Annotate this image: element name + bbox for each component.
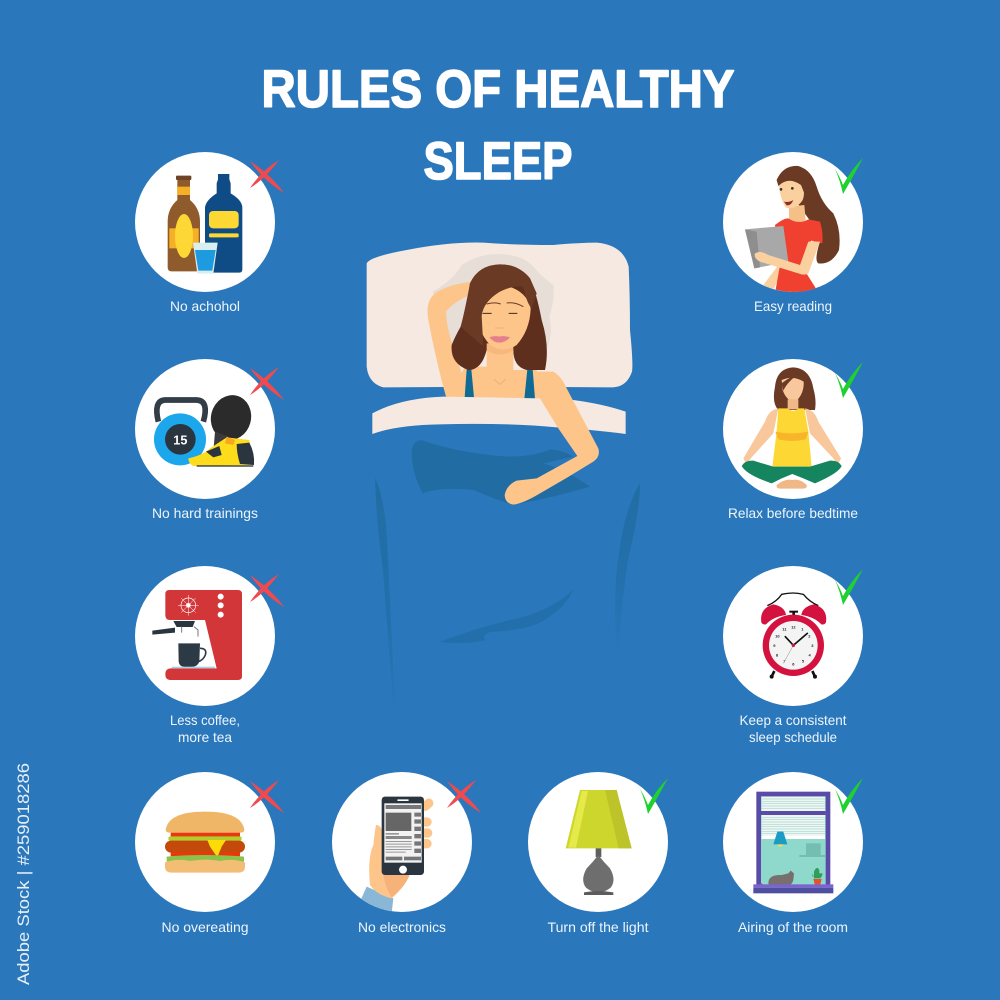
icon: kettlebell, racket and shoe (154, 391, 256, 467)
panel: no hard trainings (135, 359, 284, 521)
icon: alarm clock: 4 (809, 652, 812, 657)
lower hair (452, 264, 547, 370)
neck (487, 343, 513, 354)
panel: less coffee: more tea (178, 729, 232, 745)
label: No overeating (162, 919, 248, 935)
lying arm (505, 372, 599, 505)
circle (528, 772, 668, 912)
icon: window with cat (753, 792, 833, 893)
icon: woman meditating (742, 367, 842, 489)
icon: burger (165, 812, 245, 873)
icon: alarm clock: 6 (792, 662, 795, 667)
cross mark (447, 780, 481, 813)
mouth (489, 336, 510, 343)
neck line (494, 379, 505, 384)
stock image id caption: Adobe Stock | #259018286 (14, 763, 33, 985)
blanket fold (372, 397, 626, 434)
label: Turn off the light (548, 919, 649, 935)
icon: kettlebell, racket and shoe: 15 (173, 434, 187, 448)
icon: alarm clock: 11 (782, 627, 787, 632)
check mark (640, 778, 668, 814)
cross mark (250, 160, 284, 193)
check mark (835, 158, 863, 194)
cross mark (250, 367, 284, 400)
panel: turn off the light (528, 772, 668, 935)
panel: keep a consistent sleep schedule: sleep schedule (749, 729, 837, 745)
panel: keep a consistent sleep schedule (723, 566, 863, 745)
check mark (835, 569, 863, 605)
pillow head shadow (433, 254, 554, 350)
panel: no electronics (332, 772, 481, 935)
circle (135, 359, 275, 499)
eyebrows (487, 303, 523, 307)
icon: alarm clock: 12 (791, 624, 796, 629)
icon: alarm clock: 2 (808, 634, 811, 639)
icon: coffee machine (152, 590, 242, 680)
face (476, 285, 531, 349)
label: Keep a consistent (740, 712, 847, 728)
nose (495, 326, 504, 329)
panel: less coffee (135, 566, 284, 745)
icon: alarm clock: 8 (776, 652, 779, 657)
panel: easy reading (723, 152, 863, 314)
icon: table lamp (566, 790, 632, 895)
torso (447, 347, 542, 400)
infographic canvas (17, 69, 863, 985)
circle (332, 772, 472, 912)
label: Airing of the room (738, 919, 848, 935)
icon: alarm clock (761, 593, 826, 679)
icon: alarm clock: 10 (775, 634, 780, 639)
circle (723, 359, 863, 499)
label: Less coffee, (170, 712, 240, 728)
label: No hard trainings (152, 505, 258, 521)
pillow (367, 243, 632, 387)
upper hair (461, 264, 537, 347)
illustration: woman sleeping in bed (367, 243, 632, 505)
panel: relax before bedtime (723, 359, 863, 521)
label: No achohol (170, 298, 240, 314)
icon: alarm clock: 1 (801, 627, 804, 632)
blanket body shadow (412, 440, 590, 505)
blanket wrinkle shadows (375, 478, 640, 735)
circle (135, 772, 275, 912)
title (262, 60, 734, 191)
label: Relax before bedtime (728, 505, 858, 521)
panel: no alcohol (135, 152, 284, 314)
raised arm (427, 282, 473, 397)
icon: alarm clock: 5 (802, 659, 805, 664)
circle (135, 566, 275, 706)
label: No electronics (358, 919, 446, 935)
top straps (465, 369, 535, 399)
icon: bottles and glass (168, 174, 242, 274)
check mark (835, 778, 863, 814)
panel: no overeating (135, 772, 284, 935)
panel: airing of the room (723, 772, 863, 935)
icon: alarm clock: 3 (811, 643, 814, 648)
icon: alarm clock: 7 (783, 659, 786, 664)
closed eyes (483, 312, 517, 315)
label: Easy reading (754, 298, 832, 314)
cross mark (250, 574, 284, 607)
icon: woman reading a book (745, 166, 840, 293)
title: SLEEP (424, 132, 572, 191)
icon: alarm clock: 9 (773, 643, 776, 648)
circle (723, 772, 863, 912)
cross mark (250, 780, 284, 813)
circle (723, 566, 863, 706)
circle (135, 152, 275, 292)
circle (723, 152, 863, 292)
check mark (835, 362, 863, 398)
icon: hand holding phone (360, 797, 435, 913)
title: RULES OF HEALTHY (262, 60, 734, 119)
